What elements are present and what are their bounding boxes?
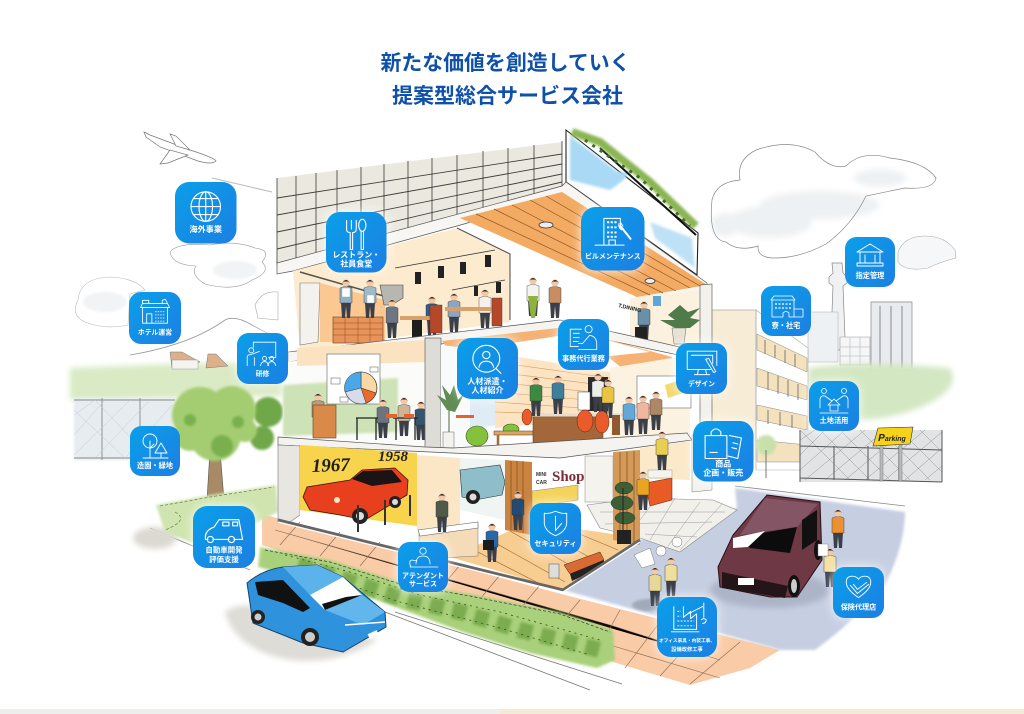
icon: globe — [191, 192, 221, 221]
potted plant — [437, 385, 465, 448]
label: 造園・緑地 — [137, 461, 174, 470]
badge: hotel operations — [129, 292, 181, 344]
orange wooden ceiling — [460, 192, 707, 297]
clouds: upper right — [711, 144, 956, 269]
ground shadow: rear hedge — [133, 527, 177, 549]
red chairs — [522, 409, 609, 433]
title — [380, 52, 631, 108]
rooftop sky panel and ivy — [566, 130, 698, 275]
mini car shop sign: Shop — [552, 469, 585, 485]
label: レストラン・ — [332, 250, 380, 259]
parking sign — [873, 427, 913, 446]
seminar room — [283, 340, 427, 447]
bench and ashtray — [549, 552, 604, 581]
exhibition poster with red car — [300, 445, 417, 532]
bottom page strip — [0, 709, 1024, 714]
badge: office furniture and renovation — [657, 597, 717, 657]
building — [277, 130, 737, 592]
white tiled floor — [587, 498, 737, 552]
icon: shield — [544, 511, 567, 536]
label: 指定管理 — [856, 271, 884, 280]
badge: staffing and recruitment: 人材紹介 — [471, 385, 504, 395]
upper floor slab — [288, 320, 702, 362]
seminar audience — [356, 397, 427, 440]
label: 研修 — [256, 369, 269, 378]
bystanders near van — [818, 509, 844, 587]
badge: vehicle development support: 評価支援 — [209, 554, 239, 564]
badge: clerical outsourcing — [558, 319, 609, 370]
second floor ceiling stripes — [442, 328, 672, 368]
maroon van — [718, 495, 822, 598]
icon: fork and spoon — [347, 219, 366, 250]
badge: overseas business — [175, 182, 236, 244]
label: アテンダント — [402, 571, 444, 580]
office tables — [494, 415, 655, 449]
icon: building and wrench — [595, 218, 631, 245]
icon: hotel — [140, 299, 170, 323]
clouds: left — [75, 243, 278, 327]
right building pillars — [700, 284, 712, 440]
hedge: front — [258, 547, 615, 668]
badge: vehicle development support — [193, 506, 255, 568]
icon: car — [205, 520, 243, 543]
pendant lights — [395, 250, 505, 296]
lobby staff, upper floor: T.DINING — [618, 303, 642, 314]
icon: documents and person — [570, 326, 597, 350]
label: セキュリティ — [534, 540, 577, 548]
icon: heart with check — [846, 576, 871, 598]
presentation screen with pie chart — [327, 354, 380, 404]
apartment building: right — [712, 310, 808, 478]
label: 土地活用 — [820, 416, 848, 425]
brick paving — [262, 514, 780, 685]
office people — [530, 373, 662, 435]
label: 保険代理店 — [841, 602, 876, 611]
badge: product planning and sales — [693, 421, 754, 482]
road kerb lines — [150, 528, 622, 690]
airplane — [144, 132, 272, 192]
badge glows — [193, 207, 884, 657]
label: 事務代行業務 — [562, 354, 605, 363]
mini car shop sign: MINI — [536, 472, 547, 478]
icon: people and house — [820, 388, 848, 413]
icon: public hall — [857, 244, 883, 266]
icon: building with crane — [671, 603, 706, 632]
exhibition poster with red car: 1967 — [311, 455, 352, 477]
asphalt parking lot — [563, 486, 905, 650]
rope barrier — [358, 495, 410, 532]
badge: designated management — [845, 237, 895, 287]
hedge: rear — [156, 485, 278, 548]
wooden pillar — [505, 460, 532, 535]
icon: monitor and pen — [687, 351, 717, 375]
label: 自動車開発 — [205, 545, 243, 555]
badge: attendant service — [398, 542, 448, 592]
teal classic car — [460, 465, 505, 504]
hills and background greenery: left — [70, 318, 282, 400]
building base line — [278, 520, 640, 590]
label: ホテル運営 — [138, 328, 172, 337]
label: ビルメンテナンス — [585, 251, 641, 260]
badge: product planning and sales: 企画・販売 — [703, 467, 743, 477]
upper floor back wall — [293, 228, 510, 350]
title: 新たな価値を創造していく — [380, 52, 631, 75]
restaurant people and tables — [340, 279, 502, 342]
presenter and podium — [312, 393, 336, 438]
title: 提案型総合サービス会社 — [392, 85, 623, 108]
badge: insurance agency — [833, 567, 884, 618]
badge: restaurants and staff canteens: 社員食堂 — [340, 258, 372, 268]
badge: staffing and recruitment — [457, 338, 518, 399]
icon: shopping bag and brochure — [705, 429, 741, 459]
red sports car — [303, 468, 408, 524]
icon: receptionist — [410, 548, 438, 567]
label: オフィス家具・内装工事、 — [659, 637, 715, 644]
upper facade grid — [277, 141, 562, 265]
badge: attendant service: サービス — [409, 579, 437, 588]
badge: restaurants and staff canteens — [326, 212, 386, 272]
wood deck — [450, 522, 640, 590]
label: デザイン — [688, 379, 715, 388]
badge: security — [530, 503, 581, 554]
reception desk — [418, 493, 478, 558]
lobby staff, upper floor — [527, 277, 700, 344]
city tower and high-rise — [808, 263, 912, 370]
mini car shop sign — [532, 462, 585, 507]
tree: left — [172, 386, 283, 500]
label: 人材派遣・ — [467, 376, 508, 386]
visitor — [483, 523, 498, 562]
greenery: right — [808, 364, 953, 422]
label: 海外事業 — [190, 224, 222, 234]
white slab under facade — [277, 182, 707, 298]
restaurant kitchen — [300, 272, 403, 345]
wooden pillar with plant — [611, 450, 640, 545]
badge: dormitories and company housing — [761, 286, 811, 336]
icon: trees — [143, 434, 168, 458]
second floor office — [437, 345, 691, 454]
label: 寮・社宅 — [772, 321, 800, 330]
blue car — [225, 565, 386, 661]
parking fence — [800, 430, 942, 482]
second floor slab — [278, 433, 692, 458]
icon: magnifier with person — [473, 345, 501, 373]
badge: design — [676, 343, 727, 394]
surveyors — [632, 537, 682, 611]
ground floor — [278, 431, 737, 592]
badge: building maintenance — [581, 207, 644, 270]
fence: left — [74, 398, 175, 460]
central pillar — [425, 338, 441, 448]
label: 商品 — [715, 458, 731, 468]
merchandise counter — [637, 431, 690, 510]
badge: training — [237, 333, 288, 384]
parking sign: Parking — [878, 433, 907, 444]
badge: land utilisation — [809, 381, 859, 431]
icon: dormitory — [771, 296, 803, 317]
mini car shop sign: CAR — [536, 480, 547, 486]
security guard — [512, 491, 524, 530]
green chairs — [466, 424, 563, 454]
exhibition poster with red car: 1958 — [378, 449, 408, 465]
badge: office furniture and renovation: 設備改修工事 — [671, 645, 704, 653]
badge: landscaping — [130, 426, 180, 476]
icon: training — [247, 342, 276, 366]
